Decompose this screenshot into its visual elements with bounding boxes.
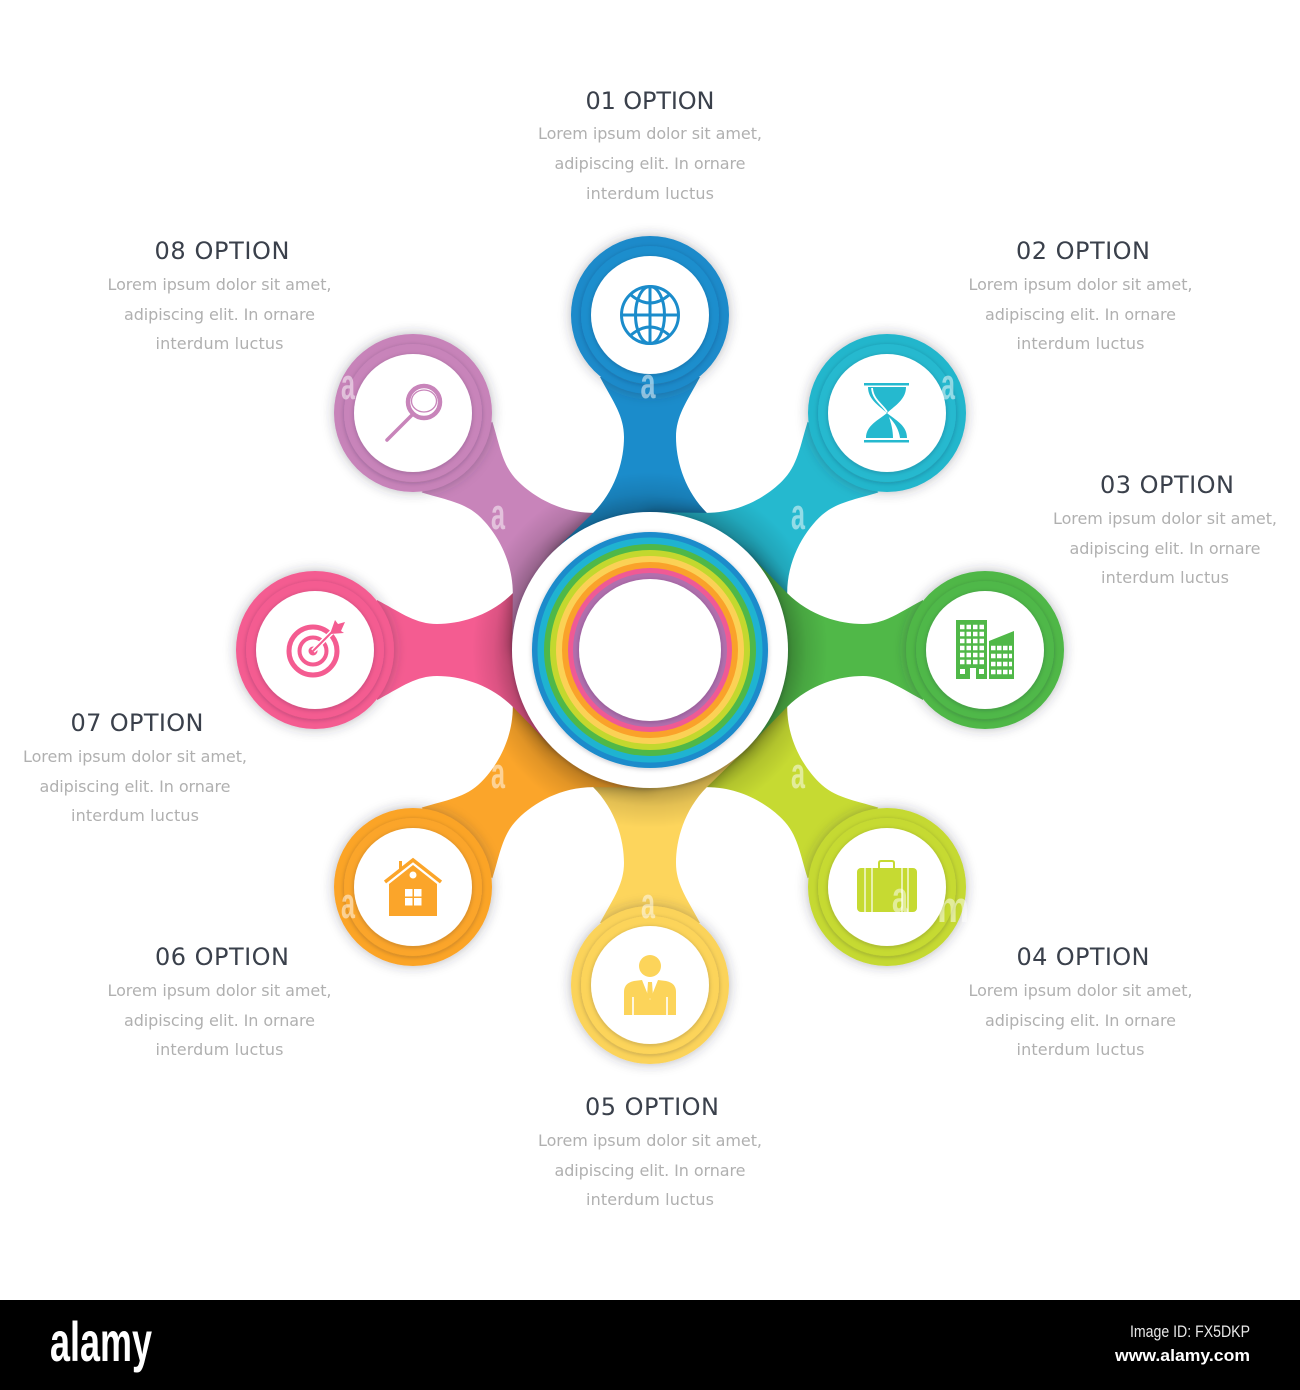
option 04 text [968,943,1192,1059]
watermark letters: a [341,879,355,928]
option 07 text [23,709,247,825]
icon: suitcase [857,861,917,912]
node: 05 person [571,906,729,1064]
heading 04: 04 OPTION [1016,943,1150,971]
connector: 04 lime [579,579,914,914]
description 03: Lorem ipsum dolor sit amet, [1053,509,1277,528]
footer image id: Image ID: FX5DKP [1130,1322,1250,1341]
option 02 text [968,237,1192,353]
description 08: Lorem ipsum dolor sit amet, [108,275,332,294]
connector: 05 yellow [593,745,752,923]
icon: person [624,955,676,1015]
description 06: adipiscing elit. In ornare [124,1011,315,1030]
option 08 text [108,237,332,353]
description 04: Lorem ipsum dolor sit amet, [968,981,1192,1000]
option 06 text [108,943,332,1059]
description 05: interdum luctus [586,1190,714,1209]
description 06: Lorem ipsum dolor sit amet, [108,981,332,1000]
watermark letters: a [791,749,805,798]
icon: target [289,620,345,675]
watermark letters: a [791,490,805,539]
heading 02: 02 OPTION [1016,237,1150,265]
watermark letters: a [892,873,908,922]
watermark letters: a [640,359,656,408]
description 07: interdum luctus [71,806,199,825]
hub shadow on connectors [472,472,828,828]
icon: buildings [956,620,1014,679]
icon: house [385,860,441,916]
description 02: adipiscing elit. In ornare [985,305,1176,324]
node: 06 house [334,808,492,966]
watermark letters: a [341,360,355,409]
node: 01 globe [571,236,729,394]
description 03: interdum luctus [1101,568,1229,587]
connector: 06 orange [422,706,656,878]
connector: 08 purple [422,422,594,656]
description 02: Lorem ipsum dolor sit amet, [968,275,1192,294]
icon: magnifier [387,386,440,440]
connector: 03 green [744,548,923,752]
icon: hourglass [864,383,909,442]
option 03 text [1053,471,1277,587]
heading 08: 08 OPTION [154,237,290,265]
description 04: interdum luctus [1016,1040,1144,1059]
description 02: interdum luctus [1016,334,1144,353]
description 05: adipiscing elit. In ornare [554,1161,746,1180]
connector: 07 pink [377,593,556,752]
description 07: Lorem ipsum dolor sit amet, [23,747,247,766]
node: 08 magnifier [334,334,492,492]
heading 05: 05 OPTION [585,1093,719,1121]
description 01: adipiscing elit. In ornare [554,154,746,173]
option 05 text [538,1093,762,1209]
node: 07 target [236,571,394,729]
description 08: interdum luctus [156,334,284,353]
description 04: adipiscing elit. In ornare [985,1011,1176,1030]
watermark letters: a [491,749,505,798]
description 03: adipiscing elit. In ornare [1070,539,1260,558]
footer logo: alamy [50,1310,152,1373]
node: 04 suitcase [808,808,966,966]
watermark letters [341,359,969,932]
heading 06: 06 OPTION [155,943,289,971]
description 08: adipiscing elit. In ornare [124,305,315,324]
description 01: Lorem ipsum dolor sit amet, [538,124,762,143]
icon: globe [621,286,679,344]
description 01: interdum luctus [586,184,714,203]
heading 03: 03 OPTION [1100,471,1234,499]
center hub [512,512,788,788]
option 01 text [538,87,762,203]
description 05: Lorem ipsum dolor sit amet, [538,1131,762,1150]
description 07: adipiscing elit. In ornare [40,777,230,796]
node: 03 buildings [906,571,1064,729]
footer url: www.alamy.com [1114,1346,1250,1365]
watermark letters: a [641,879,655,928]
node: 02 hourglass [808,334,966,492]
footer bar [0,1300,1300,1390]
watermark letters: a [491,490,505,539]
heading 07: 07 OPTION [70,709,204,737]
connector: 02 teal [645,422,878,594]
connector: 01 blue [548,377,707,556]
watermark letters: a [941,360,955,409]
description 06: interdum luctus [156,1040,284,1059]
watermark letters: m [937,883,969,932]
heading 01: 01 OPTION [586,87,714,115]
